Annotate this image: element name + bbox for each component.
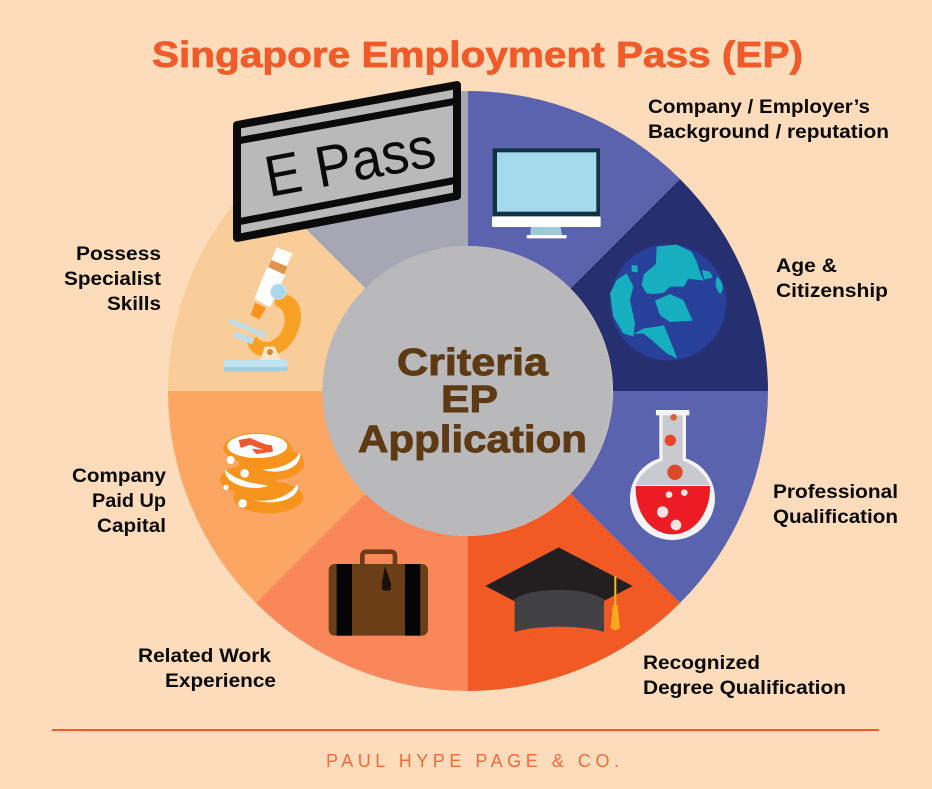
center heading: Criteria xyxy=(397,342,549,384)
icon: microscope xyxy=(224,247,301,371)
label: age and citizenship: Age & xyxy=(776,256,837,277)
label: recognized degree qualification: Degree Qualification xyxy=(643,678,846,699)
label: recognized degree qualification xyxy=(643,653,846,699)
icon: briefcase xyxy=(329,552,428,636)
label: professional qualification xyxy=(773,482,898,528)
label: professional qualification: Qualification xyxy=(773,507,898,528)
label: company background xyxy=(648,97,889,143)
label: age and citizenship xyxy=(776,256,888,302)
segment: company background xyxy=(468,91,680,288)
label: professional qualification: Professional xyxy=(773,482,898,503)
footer company name: PAUL HYPE PAGE & CO. xyxy=(326,751,619,771)
segment: age and citizenship xyxy=(570,179,768,391)
label: recognized degree qualification: Recognized xyxy=(643,653,760,674)
segment: related work experience xyxy=(256,494,468,691)
icon: E Pass sign xyxy=(237,85,457,238)
label: company paid up capital: Company xyxy=(72,466,166,487)
label: company background: Background / reputation xyxy=(648,122,889,143)
icon: graduation cap xyxy=(485,547,633,632)
icon: globe xyxy=(610,244,726,360)
label: related work experience: Experience xyxy=(165,671,276,692)
label: specialist skills: Possess xyxy=(76,244,161,265)
donut chart of criteria xyxy=(168,91,768,691)
label: company background: Company / Employer’s xyxy=(648,97,870,118)
segment: recognized degree xyxy=(468,494,680,691)
segment: company paid up capital xyxy=(168,391,366,603)
label: age and citizenship: Citizenship xyxy=(776,281,888,302)
label: specialist skills: Skills xyxy=(107,294,161,315)
icon: E Pass sign: E Pass xyxy=(260,115,440,210)
center heading xyxy=(358,342,587,461)
label: company paid up capital xyxy=(72,466,166,537)
label: company paid up capital: Capital xyxy=(97,516,166,537)
center heading: EP xyxy=(441,379,498,421)
icon: computer monitor xyxy=(492,148,601,238)
label: related work experience: Related Work xyxy=(138,646,271,667)
icon: flask xyxy=(630,410,715,540)
label: specialist skills xyxy=(64,244,162,315)
title: Singapore Employment Pass (EP) xyxy=(152,34,803,75)
icon: stacked coins xyxy=(220,433,304,513)
label: related work experience xyxy=(138,646,276,692)
segment: specialist skills xyxy=(168,179,366,391)
segment: E Pass xyxy=(256,91,468,288)
segment: professional qualification xyxy=(570,391,768,603)
label: specialist skills: Specialist xyxy=(64,269,162,290)
center circle xyxy=(322,246,612,536)
center heading: Application xyxy=(358,419,587,461)
label: company paid up capital: Paid Up xyxy=(92,491,166,512)
